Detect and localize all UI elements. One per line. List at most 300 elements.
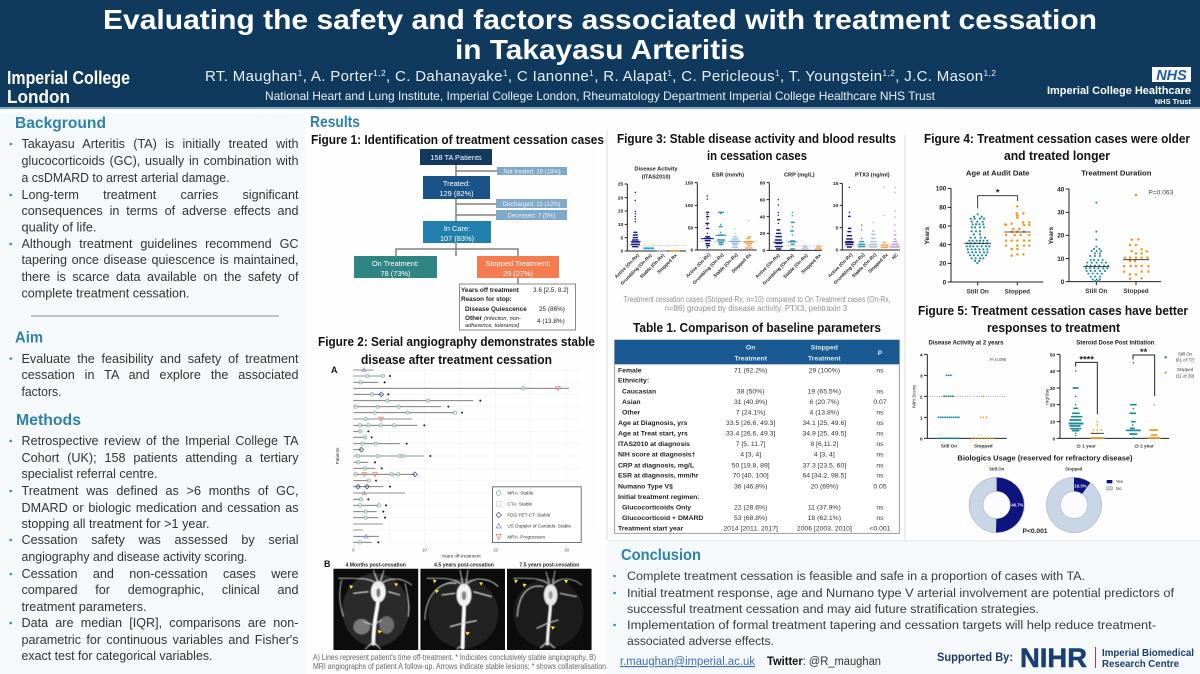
stopped treatment details: 25 (86%) bbox=[539, 306, 565, 313]
donut: stopped bbox=[1046, 477, 1102, 533]
node: stopped treatment: 29 (27%) bbox=[503, 269, 533, 278]
aim text bbox=[11, 351, 299, 399]
logo: NIHR: NIHR bbox=[1020, 643, 1087, 673]
chart: patient timelines: 20 bbox=[493, 548, 499, 553]
authors: , R. Alapat bbox=[594, 68, 668, 85]
figure 4 title: Figure 4: Treatment cessation cases were older bbox=[924, 132, 1190, 146]
chart: steroid dose post initiation bbox=[1044, 341, 1195, 448]
logo: Imperial College London: Imperial College bbox=[7, 67, 130, 88]
chart: ESR: ESR (mm/h) bbox=[712, 173, 744, 179]
legend: steroid dose: Still On bbox=[1178, 352, 1193, 357]
background text: Takayasu Arteritis (TA) is initially treated with bbox=[22, 137, 298, 151]
table of baseline parameters: 34.9 [25, 49.5] bbox=[802, 431, 846, 438]
figure 3 title: Figure 3: Stable disease activity and blood results bbox=[617, 132, 896, 146]
MRI image 3 bbox=[507, 569, 592, 650]
table of baseline parameters: Asian bbox=[622, 399, 641, 406]
table of baseline parameters: Glucocorticoid + DMARD bbox=[622, 515, 703, 522]
title bbox=[103, 4, 1097, 65]
logo: Imperial College London: London bbox=[7, 86, 70, 107]
background text: consequences in terms of adverse effects and bbox=[22, 204, 298, 218]
chart: disease activity: Disease Activity bbox=[634, 167, 678, 173]
table of baseline parameters: 6 (20.7%) bbox=[810, 399, 839, 406]
chart: age at audit date: * bbox=[996, 187, 1000, 197]
legend bbox=[492, 487, 581, 542]
chart: disease activity at 2 years: 2 bbox=[920, 394, 923, 400]
stopped treatment details: 3.6 [2.5, 8.2] bbox=[533, 287, 569, 294]
legend: steroid dose bbox=[1164, 352, 1195, 379]
chart: ESR: Active (On-Rx) bbox=[685, 252, 712, 279]
chart: ESR: 100 bbox=[685, 203, 694, 209]
table of baseline parameters: 7 (24.1%) bbox=[736, 409, 765, 416]
table of baseline parameters: 70 [40, 100] bbox=[733, 473, 769, 480]
chart: biologics usage bbox=[957, 453, 1133, 535]
chart: disease activity at 2 years: Stopped bbox=[974, 443, 993, 448]
chart: disease activity: 5 bbox=[621, 235, 624, 241]
panel B: MRI angiographs: 4 Months post-cessation bbox=[345, 563, 406, 569]
figure 4 title bbox=[924, 132, 1190, 163]
chart: PTX3: Stopped Rx bbox=[867, 252, 889, 274]
chart: age at audit date: 60 bbox=[939, 223, 947, 230]
authors: RT. Maughan bbox=[205, 68, 297, 85]
chart: PTX3: 5 bbox=[836, 225, 839, 231]
legend: biologics bbox=[1107, 479, 1123, 491]
table of baseline parameters: 4 (13.8%) bbox=[810, 409, 839, 416]
chart: treatment duration: Years bbox=[1048, 226, 1055, 245]
table of baseline parameters: 4 [3, 4] bbox=[814, 452, 835, 459]
methods text: DMARD or biologic medication and cessation as bbox=[22, 501, 298, 515]
table of baseline parameters: 0.05 bbox=[873, 483, 887, 490]
panel: table 1 bbox=[615, 321, 899, 533]
table of baseline parameters: ns bbox=[876, 504, 884, 511]
table of baseline parameters bbox=[615, 340, 899, 533]
table of baseline parameters: Age at Diagnosis, yrs bbox=[618, 420, 688, 427]
background text: Long-term treatment carries significant bbox=[22, 188, 298, 202]
contact email: r.maughan@imperial.ac.uk bbox=[620, 656, 755, 668]
chart: disease activity: 10 bbox=[618, 222, 624, 228]
panel: background bbox=[11, 115, 299, 301]
authors: , C. Pericleous bbox=[672, 68, 775, 85]
conclusion text bbox=[614, 569, 1175, 648]
charts: disease activity, steroid dose and biologics bbox=[912, 341, 1195, 535]
table of baseline parameters: 31 (40.8%) bbox=[734, 399, 767, 406]
table of baseline parameters: ns bbox=[876, 431, 884, 438]
table of baseline parameters: 11 (37.9%) bbox=[808, 504, 841, 511]
chart: disease activity at 2 years: Disease Activity at 2 years bbox=[929, 341, 1004, 347]
chart: treatment duration: 40 bbox=[1057, 186, 1065, 193]
figure 3 caption bbox=[624, 295, 890, 313]
node: in care bbox=[423, 221, 491, 243]
table of baseline parameters: Treatment bbox=[808, 356, 841, 363]
panel B: MRI angiographs bbox=[324, 559, 592, 650]
chart: steroid dose post initiation: 50 bbox=[1050, 352, 1056, 358]
chart: patient timelines: 10 bbox=[422, 548, 427, 553]
chart: disease activity at 2 years: 0 bbox=[920, 436, 923, 442]
chart: ESR: 50 bbox=[688, 225, 694, 231]
figure 2 title bbox=[318, 335, 595, 367]
stopped treatment details: Reason for stop: bbox=[461, 296, 512, 303]
background text: complete treatment cessation. bbox=[22, 287, 190, 301]
chart: steroid dose post initiation: @ 2 year bbox=[1134, 443, 1154, 448]
table of baseline parameters: ns bbox=[876, 452, 884, 459]
chart: steroid dose post initiation: ** bbox=[1140, 347, 1148, 357]
chart: disease activity at 2 years: NIH Score bbox=[912, 385, 918, 408]
stopped treatment details bbox=[460, 284, 576, 330]
table of baseline parameters: Age at Treat start, yrs bbox=[618, 431, 688, 438]
authors: , J.C. Mason bbox=[895, 68, 983, 85]
chart: treatment duration: Treatment Duration bbox=[1081, 168, 1152, 177]
table of baseline parameters: 71 (92.2%) bbox=[734, 367, 767, 374]
authors: , C. Dahanayake bbox=[386, 68, 502, 85]
stopped treatment details: Years off treatment bbox=[461, 287, 520, 294]
node: discharged: Discharged: 15 (12%) bbox=[502, 202, 561, 208]
chart: biologics usage: Stopped bbox=[1065, 466, 1083, 471]
legend: biologics: Yes bbox=[1116, 479, 1123, 484]
table of baseline parameters: 64 [34.2, 98.5] bbox=[802, 473, 846, 480]
legend: steroid dose: (61 of 77) bbox=[1176, 358, 1195, 363]
chart: patient timelines: 0 bbox=[352, 548, 355, 553]
node: stopped treatment bbox=[477, 256, 559, 278]
node: treated bbox=[423, 176, 490, 199]
chart: disease activity bbox=[614, 167, 686, 286]
chart: PTX3: 0 bbox=[836, 248, 839, 254]
chart: PTX3 bbox=[827, 173, 900, 285]
chart: ESR bbox=[685, 173, 757, 285]
chart: PTX3: Grumbling (On-Rx) bbox=[833, 252, 866, 285]
table of baseline parameters: ns bbox=[876, 409, 884, 416]
chart: disease activity: Stable (On-Rx) bbox=[639, 253, 666, 279]
node: 158 TA patients bbox=[420, 149, 492, 165]
heading: results: Results bbox=[310, 114, 360, 131]
chart: treatment duration: 0 bbox=[1061, 279, 1065, 286]
legend: MRA: Stable bbox=[507, 491, 534, 496]
figure 4 title: and treated longer bbox=[1004, 149, 1110, 163]
table of baseline parameters: CRP at diagnosis, mg/L bbox=[618, 462, 694, 469]
conclusion text: associated adverse effects. bbox=[627, 634, 774, 648]
logo: NIHR: Imperial Biomedical bbox=[1102, 647, 1194, 659]
node: not treated: Not treated: 29 (18%) bbox=[503, 170, 561, 176]
panel: methods bbox=[11, 412, 299, 663]
table of baseline parameters: Stopped bbox=[811, 344, 838, 351]
chart: patient timelines: A bbox=[331, 365, 338, 375]
chart: patient timelines: 30 bbox=[564, 548, 570, 553]
affiliation: National Heart and Lung Institute, Imperial College London, Rheumatology Department Imperial College Healthcare NHS Trust bbox=[265, 90, 936, 103]
table of baseline parameters: 2014 [2011, 2017] bbox=[723, 525, 778, 532]
node: 158 TA patients: 158 TA Patients bbox=[430, 153, 482, 162]
chart: steroid dose post initiation: **** bbox=[1079, 354, 1094, 364]
stopped treatment details: Other (infection, non- bbox=[465, 315, 521, 322]
background text: tapering once disease quiescence is maintained, bbox=[22, 253, 298, 267]
chart: CRP bbox=[754, 173, 822, 286]
chart: age at audit date: Stopped bbox=[1005, 289, 1030, 296]
chart: PTX3: Stable (On-Rx) bbox=[851, 252, 878, 279]
authors: 1,2 bbox=[983, 68, 996, 78]
table of baseline parameters: Ethnicity: bbox=[618, 378, 649, 385]
chart: disease activity: 25 bbox=[618, 182, 624, 188]
table of baseline parameters: 33.5 [26.6, 49.3] bbox=[726, 420, 775, 427]
authors: 1 bbox=[775, 68, 780, 78]
chart: treatment duration: 30 bbox=[1057, 210, 1065, 217]
conclusion text: Complete treatment cessation is feasible and safe in a proportion of cases with TA. bbox=[627, 569, 1085, 583]
chart: ESR: Stopped Rx bbox=[731, 252, 753, 274]
logo: NIHR bbox=[1020, 643, 1194, 673]
chart: disease activity: Stopped Rx bbox=[656, 253, 678, 275]
chart: ESR: 0 bbox=[691, 248, 694, 254]
panel: figure 1 flowchart bbox=[311, 133, 604, 330]
panel: figure 4 bbox=[924, 132, 1190, 296]
stopped treatment details: Disease Quiescence bbox=[465, 306, 527, 313]
panel: figure 3 bbox=[614, 132, 900, 313]
table of baseline parameters: ns bbox=[876, 388, 884, 395]
chart: disease activity at 2 years: P=0.096 bbox=[990, 357, 1007, 362]
table of baseline parameters: Initial treatment regimen: bbox=[618, 494, 700, 501]
legend: steroid dose: (11 of 29) bbox=[1176, 374, 1195, 379]
heading: aim: Aim bbox=[15, 329, 43, 346]
chart: PTX3: HC bbox=[891, 252, 899, 260]
chart: ESR: Stable (On-Rx) bbox=[712, 252, 739, 279]
table of baseline parameters: P bbox=[878, 350, 883, 357]
node: in care: 107 (83%) bbox=[440, 234, 474, 243]
table of baseline parameters: 37.3 [23.5, 60] bbox=[802, 462, 846, 469]
chart: treatment duration: Stopped bbox=[1123, 288, 1149, 295]
table of baseline parameters: 33.4 [26.6, 49.3] bbox=[726, 431, 775, 438]
chart: disease activity at 2 years: 1 bbox=[920, 415, 923, 421]
table of baseline parameters: 4 [3, 4] bbox=[740, 452, 761, 459]
figure 5 title: responses to treatment bbox=[987, 321, 1121, 335]
chart: disease activity at 2 years: Still On bbox=[941, 443, 957, 448]
MRI image 1 bbox=[333, 569, 418, 650]
chart: steroid dose post initiation: 30 bbox=[1050, 386, 1056, 392]
stopped treatment details: 4 (13.8%) bbox=[537, 318, 565, 325]
chart: disease activity: Grumbling (On-Rx) bbox=[620, 253, 653, 286]
dot plots: disease activity and blood results bbox=[614, 167, 900, 286]
methods text: Cohort (UK); 158 patients attending a tertiary bbox=[22, 451, 298, 465]
charts: age and treatment duration bbox=[924, 168, 1174, 296]
authors: 1,2 bbox=[373, 68, 386, 78]
heading: background: Background bbox=[15, 115, 106, 132]
node: stopped treatment: Stopped Treatment: bbox=[486, 259, 550, 268]
panel: conclusion bbox=[614, 547, 1194, 673]
chart: CRP: 0 bbox=[763, 248, 766, 254]
logo: NIHR: Research Centre bbox=[1102, 658, 1179, 670]
chart: biologics usage: Biologics Usage (reserved for refractory disease) bbox=[957, 453, 1133, 462]
table of baseline parameters: 19 (65.5%) bbox=[808, 388, 841, 395]
chart: disease activity: (ITAS2010) bbox=[642, 175, 671, 181]
figure 2 caption: MRI angiographs of patient A follow-up. Arrows indicate stable lesions; * shows collateralisation bbox=[313, 661, 606, 671]
chart: patient timelines bbox=[331, 365, 581, 559]
chart: steroid dose post initiation: Steroid Dose Post Initiation bbox=[1076, 341, 1155, 347]
supported by: Supported By: bbox=[937, 652, 1013, 664]
panel: aim bbox=[11, 329, 299, 399]
chart: biologics usage: P<0.001 bbox=[1023, 528, 1048, 535]
table of baseline parameters: 34.1 [25, 49.6] bbox=[802, 420, 846, 427]
chart: treatment duration: Still On bbox=[1085, 288, 1108, 295]
figure 2 caption bbox=[313, 652, 606, 671]
chart: ESR: Grumbling (On-Rx) bbox=[692, 252, 725, 285]
table of baseline parameters: 22 (28.6%) bbox=[734, 504, 767, 511]
MRI image 2 bbox=[420, 569, 505, 650]
authors: 1 bbox=[589, 68, 594, 78]
chart: disease activity: 0 bbox=[621, 249, 624, 255]
chart: treatment duration: P=0.063 bbox=[1148, 190, 1174, 197]
chart: steroid dose post initiation: 0 bbox=[1053, 436, 1056, 442]
methods text: treatment parameters. bbox=[22, 600, 146, 614]
conclusion text: Implementation of formal treatment tapering and cessation targets will help reduce treatment- bbox=[627, 618, 1156, 632]
figure 5 title: Figure 5: Treatment cessation cases have better bbox=[918, 304, 1188, 318]
figure 3 caption: n=86) grouped by disease activity. PTX3, pentraxin 3 bbox=[665, 304, 847, 313]
node: deceased bbox=[496, 210, 567, 220]
chart: disease activity: Active (On-Rx) bbox=[614, 253, 640, 279]
table of baseline parameters: ns bbox=[876, 462, 884, 469]
table of baseline parameters: ns bbox=[876, 441, 884, 448]
donut: still on bbox=[969, 477, 1024, 533]
chart: age at audit date: 40 bbox=[939, 242, 947, 249]
table of baseline parameters: ns bbox=[876, 515, 884, 522]
methods text: stopping all treatment for >1 year. bbox=[22, 517, 210, 531]
figure 3 caption: Treatment cessation cases (Stopped-Rx, n=10) compared to On Treatment cases (On-Rx, bbox=[624, 295, 890, 304]
table of baseline parameters: Glucocorticoids Only bbox=[622, 504, 691, 511]
node: treated: 129 (82%) bbox=[439, 189, 474, 198]
table of baseline parameters: Numano Type V§ bbox=[618, 483, 673, 490]
panel B: MRI angiographs: B bbox=[324, 559, 331, 569]
chart: age at audit date: 80 bbox=[939, 205, 947, 212]
methods text: exact test for categorical variables. bbox=[22, 649, 212, 663]
node: not treated bbox=[497, 167, 567, 176]
methods text: specialist referral centre. bbox=[22, 467, 158, 481]
chart: patient timelines: Patients bbox=[335, 447, 340, 464]
table of baseline parameters: Female bbox=[618, 367, 642, 374]
background text: there is scarce data available on the safety of bbox=[22, 270, 298, 284]
background text bbox=[11, 136, 299, 301]
logo: NHS bbox=[1047, 67, 1191, 106]
figure 2 title: Figure 2: Serial angiography demonstrates stable bbox=[318, 335, 595, 349]
chart: CRP: Stable (On-Rx) bbox=[782, 253, 809, 279]
table of baseline parameters: ESR at diagnosis, mm/hr bbox=[618, 473, 699, 480]
table of baseline parameters: Treatment bbox=[734, 356, 768, 363]
authors: 1 bbox=[667, 68, 672, 78]
methods text bbox=[11, 433, 299, 663]
figure 2 caption: A) Lines represent patient's time off-treatment. * Indicates conclusively stable angiography. B) bbox=[313, 652, 596, 662]
chart: age at audit date: 100 bbox=[936, 186, 947, 193]
chart: ESR: 150 bbox=[685, 180, 694, 186]
twitter handle: Twitter: @R_maughan bbox=[767, 656, 881, 668]
authors: 1,2 bbox=[882, 68, 895, 78]
logo: NHS: NHS bbox=[1156, 68, 1187, 84]
chart: steroid dose post initiation: 10 bbox=[1050, 420, 1056, 426]
legend: MRA: Progression bbox=[507, 534, 546, 539]
node: treated: Treated: bbox=[443, 179, 470, 188]
figure 1 title: Figure 1: Identification of treatment cessation cases bbox=[311, 133, 604, 147]
chart: steroid dose post initiation: mg/day bbox=[1044, 388, 1050, 405]
chart: PTX3: 15 bbox=[833, 181, 839, 187]
chart: age at audit date: 20 bbox=[939, 261, 947, 268]
chart: age at audit date bbox=[924, 168, 1043, 296]
figure 3 title: in cessation cases bbox=[707, 149, 807, 163]
table of baseline parameters: 0.07 bbox=[873, 399, 887, 406]
methods text: Treatment was defined as >6 months of GC, bbox=[22, 484, 298, 498]
panel: figure 5 bbox=[912, 304, 1195, 535]
table of baseline parameters: ns bbox=[876, 367, 884, 374]
chart: CRP: CRP (mg/L) bbox=[784, 173, 815, 179]
table of baseline parameters: 2006 [2003, 2010] bbox=[797, 525, 852, 532]
title: Evaluating the safety and factors associated with treatment cessation bbox=[103, 4, 1097, 35]
logo: Imperial College London bbox=[7, 67, 130, 107]
table of baseline parameters: 29 (100%) bbox=[809, 367, 840, 374]
authors: , A. Porter bbox=[303, 68, 373, 85]
chart: steroid dose post initiation: 40 bbox=[1050, 369, 1056, 375]
chart: patient timelines: Years off-treatment bbox=[441, 554, 481, 559]
chart: treatment duration: 20 bbox=[1057, 233, 1065, 240]
table of baseline parameters: 20 (69%) bbox=[810, 483, 838, 490]
chart: disease activity: 15 bbox=[618, 209, 624, 215]
chart: disease activity: 20 bbox=[618, 195, 624, 201]
figure 2 title: disease after treatment cessation bbox=[361, 353, 552, 367]
table of baseline parameters: On bbox=[746, 344, 755, 351]
donut: still on: 46.7% bbox=[1011, 503, 1024, 508]
chart: biologics usage: Still On bbox=[989, 466, 1005, 471]
methods text: angiography and disease activity scoring. bbox=[22, 550, 248, 564]
stopped treatment details: adherence, tolerance) bbox=[465, 323, 520, 329]
chart: age at audit date: Still On bbox=[967, 289, 989, 296]
methods text: compared for demographic, clinical and bbox=[22, 583, 298, 597]
legend: CTA: Stable bbox=[507, 502, 532, 507]
legend: biologics: No bbox=[1116, 486, 1122, 491]
background text: a csDMARD to arrest arterial damage. bbox=[22, 171, 230, 185]
authors: , C Ianonne bbox=[508, 68, 589, 85]
chart: CRP: Grumbling (On-Rx) bbox=[762, 253, 795, 286]
chart: CRP: 80 bbox=[760, 180, 766, 186]
authors: 1 bbox=[298, 68, 303, 78]
legend: FDG PET-CT: Stable bbox=[507, 513, 551, 518]
aim text: factors. bbox=[22, 385, 62, 399]
logo: NHS: Imperial College Healthcare bbox=[1047, 85, 1191, 97]
heading: methods: Methods bbox=[16, 412, 81, 429]
chart: disease activity at 2 years: 4 bbox=[920, 352, 923, 358]
chart: PTX3: Active (On-Rx) bbox=[827, 252, 854, 279]
panel: figure 2 bbox=[313, 335, 606, 671]
methods text: Retrospective review of the Imperial College TA bbox=[22, 434, 298, 448]
node: on treatment: On Treatment: bbox=[372, 259, 419, 268]
title: in Takayasu Arteritis bbox=[455, 34, 745, 65]
aim text: cessation in TA and explore the associated bbox=[22, 368, 298, 382]
header banner bbox=[0, 0, 1200, 109]
node: discharged bbox=[496, 199, 567, 208]
logo: NHS: NHS Trust bbox=[1155, 97, 1191, 106]
methods text: Data are median [IQR], comparisons are non- bbox=[22, 616, 298, 630]
donut: stopped: 18.3% bbox=[1074, 483, 1087, 488]
flow connectors bbox=[396, 165, 518, 284]
table of baseline parameters: 36 (46.8%) bbox=[734, 483, 767, 490]
chart: CRP: 60 bbox=[760, 197, 766, 203]
methods text: parametric for continuous variables and Fisher's bbox=[22, 633, 298, 647]
legend: US Doppler of Carotids: Stable bbox=[507, 523, 571, 528]
chart: steroid dose post initiation: 20 bbox=[1050, 403, 1056, 409]
table of baseline parameters: ns bbox=[876, 420, 884, 427]
methods text: Cessation safety was assessed by serial bbox=[22, 533, 298, 547]
conclusion text: successful treatment cessation and may aid future stratification strategies. bbox=[627, 602, 1039, 616]
table of baseline parameters: NIH score at diagnosis† bbox=[618, 452, 696, 459]
heading: conclusion: Conclusion bbox=[621, 547, 701, 564]
node: deceased: Deceased: 7 (5%) bbox=[507, 214, 556, 220]
methods text: Cessation and non-cessation cases were bbox=[22, 567, 298, 581]
table of baseline parameters: ns bbox=[876, 473, 884, 480]
panel B: MRI angiographs: 4.5 years post-cessation bbox=[434, 563, 494, 569]
chart: PTX3: 10 bbox=[833, 203, 839, 209]
chart: steroid dose post initiation: @ 1 year bbox=[1076, 443, 1096, 448]
table title: Table 1. Comparison of baseline parameters bbox=[633, 321, 881, 335]
chart: disease activity at 2 years: 3 bbox=[920, 373, 923, 379]
chart: age at audit date: 0 bbox=[943, 279, 947, 286]
figure 3 title bbox=[617, 132, 896, 163]
